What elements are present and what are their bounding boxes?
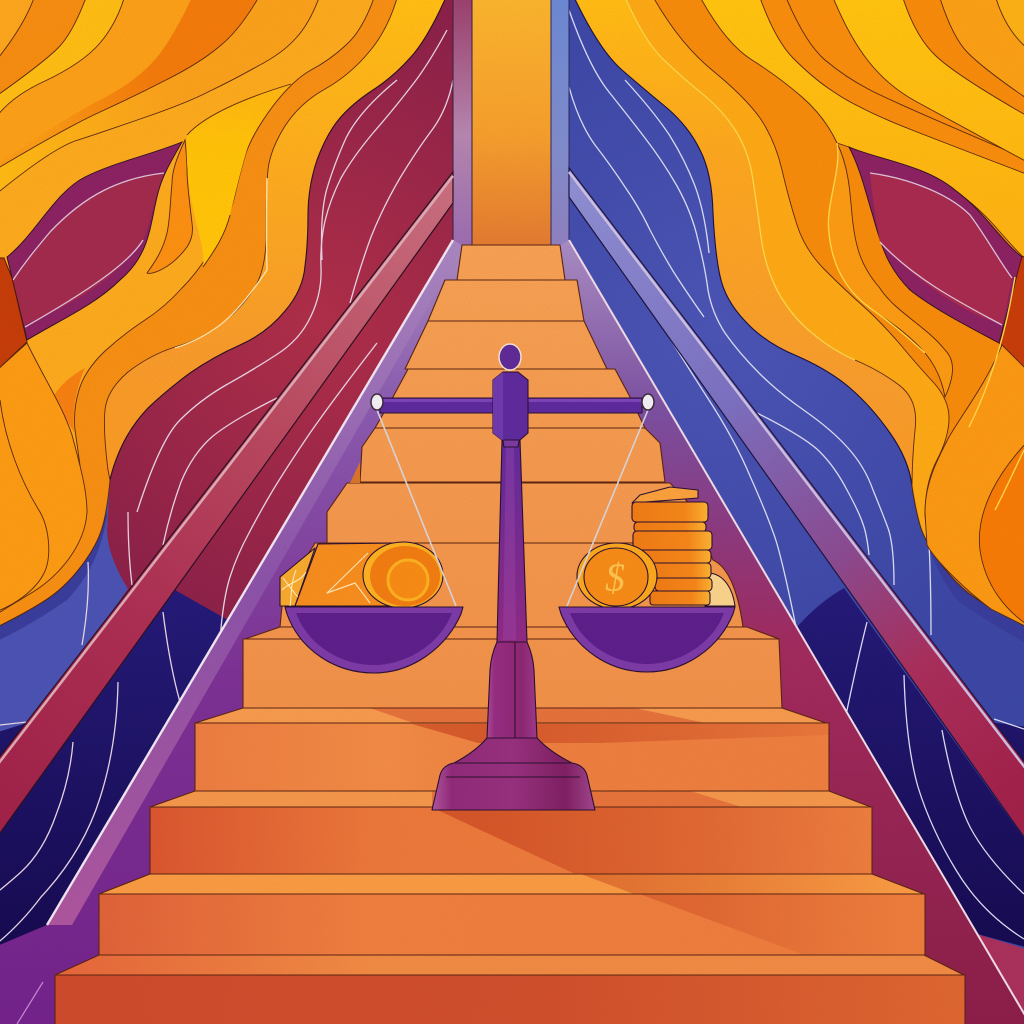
- golden flame band: [0, 0, 375, 615]
- right pan inner: [570, 613, 724, 664]
- diagonal shadow on stairs: [371, 708, 924, 954]
- left wall contour lines: [0, 30, 453, 945]
- shadow on tread 791: [432, 792, 740, 806]
- base lines: [446, 763, 580, 777]
- maroon blob centre: [870, 173, 1012, 324]
- right stringer edge line: [569, 240, 1024, 1022]
- pole highlight: [503, 445, 516, 640]
- top ball: [499, 344, 521, 370]
- lower left flame: [0, 343, 87, 615]
- stem centre line: [514, 642, 516, 738]
- riser 724: [195, 723, 829, 791]
- upper steps: [243, 245, 782, 708]
- block facet: [493, 372, 503, 440]
- yellow wave: [0, 0, 125, 119]
- shadow on riser 894: [641, 894, 924, 954]
- collar: [502, 436, 520, 447]
- right jamb: [551, 0, 569, 246]
- maroon blob: [7, 142, 182, 340]
- left navy wall: [0, 590, 228, 947]
- outer flame band: [0, 0, 447, 628]
- outer flame band: [573, 0, 1024, 628]
- riser 975: [55, 975, 965, 1024]
- wrapper lines: [282, 570, 306, 606]
- orange wave line: [785, 0, 1024, 160]
- staircase: [55, 245, 965, 1024]
- left floor line: [17, 982, 43, 1024]
- centre block: [493, 372, 528, 440]
- lower wedge: [53, 368, 85, 432]
- orange flame strip: [0, 0, 398, 628]
- right navy wall: [797, 588, 1024, 948]
- yellow flame top line: [187, 84, 291, 267]
- panel: left wall: [0, 0, 453, 955]
- orange upper wave: [759, 0, 1024, 175]
- right pan contents: [577, 487, 735, 609]
- right rail highlight: [569, 172, 1024, 773]
- lower right flame: [925, 345, 1024, 628]
- right flames: [573, 0, 1024, 628]
- right handrail: [569, 168, 1024, 844]
- golden strip: [828, 143, 952, 397]
- tread 791: [150, 791, 871, 807]
- light orange wave: [0, 0, 193, 166]
- left pan: [285, 607, 463, 673]
- light orange top wave: [939, 0, 1024, 100]
- yellow top wave: [832, 0, 1024, 163]
- left coin centre: [388, 560, 428, 600]
- maroon blob highlights: [870, 173, 1012, 325]
- upper orange wave: [0, 0, 320, 195]
- shadow on tread 708: [371, 708, 703, 722]
- gold highlight lines: [624, 0, 1024, 510]
- lower right flame core: [979, 440, 1024, 626]
- left pan contents: [280, 542, 443, 608]
- loaf highlight: [327, 553, 370, 603]
- maroon blob centre: [13, 173, 164, 325]
- left rail highlight: [0, 176, 453, 768]
- tread 874: [99, 874, 924, 894]
- cream bundle: [705, 573, 735, 606]
- red flame edge: [999, 255, 1024, 372]
- left stringer light strip: [47, 240, 463, 925]
- wedge beside upper step: [350, 462, 360, 483]
- base: [432, 738, 595, 810]
- wrapped bundle: [280, 548, 315, 606]
- dollar sign: $: [605, 555, 625, 600]
- tread 955: [55, 955, 964, 975]
- orange corner wave: [0, 0, 87, 97]
- left coin: [363, 542, 443, 608]
- right chain: [567, 410, 648, 606]
- right coin face: [584, 548, 648, 606]
- dark orange flame band: [652, 0, 1024, 628]
- red flame edge: [0, 258, 27, 372]
- left chain: [377, 410, 456, 606]
- yellow corner wave: [995, 0, 1024, 50]
- lower left flame lines: [0, 400, 49, 612]
- left coin face: [370, 546, 440, 606]
- orange strip beside yellow: [147, 140, 193, 273]
- tread 708: [195, 708, 826, 723]
- dark orange top wave: [902, 0, 1024, 117]
- centre column: [453, 0, 569, 246]
- left flames: [0, 0, 447, 628]
- left jamb: [453, 0, 472, 246]
- left pan inner: [296, 613, 452, 665]
- dark orange wave: [0, 0, 260, 170]
- beam highlight: [381, 399, 641, 402]
- shadow on riser 724: [412, 724, 829, 743]
- shadow on riser 807: [432, 808, 871, 874]
- riser 894: [99, 894, 925, 955]
- right pink wedge: [977, 934, 1024, 1022]
- shadow on tread 874: [582, 874, 923, 894]
- left ring: [371, 394, 383, 410]
- maroon blob highlights: [13, 173, 164, 327]
- balance scale: [280, 344, 735, 810]
- riser 807: [150, 807, 872, 874]
- yellow upper wave: [699, 0, 1024, 262]
- left lower blue wall: [0, 480, 128, 770]
- light corner wave: [0, 0, 35, 62]
- left stringer edge line: [47, 240, 453, 925]
- yellow flame band: [624, 0, 1024, 628]
- left flame shadow on blue: [0, 500, 107, 642]
- right pan: [559, 607, 735, 672]
- right stair stringer: [540, 240, 1024, 1024]
- right ring: [642, 394, 654, 410]
- panel: right wall: [569, 0, 1024, 1024]
- lower stem: [487, 642, 537, 738]
- upper pole: [497, 440, 527, 642]
- maroon blob: [849, 147, 1022, 343]
- left stair stringer: [0, 240, 480, 1024]
- left handrail: [0, 172, 453, 840]
- right wall contour lines: [569, 10, 1024, 939]
- loaf block: [295, 543, 400, 606]
- right flame shadow on blue: [916, 500, 1024, 645]
- coin stack: [632, 487, 712, 605]
- bright yellow flame: [187, 84, 291, 267]
- beam: [380, 398, 642, 413]
- cream highlight line: [175, 178, 267, 348]
- right coin: [577, 543, 657, 609]
